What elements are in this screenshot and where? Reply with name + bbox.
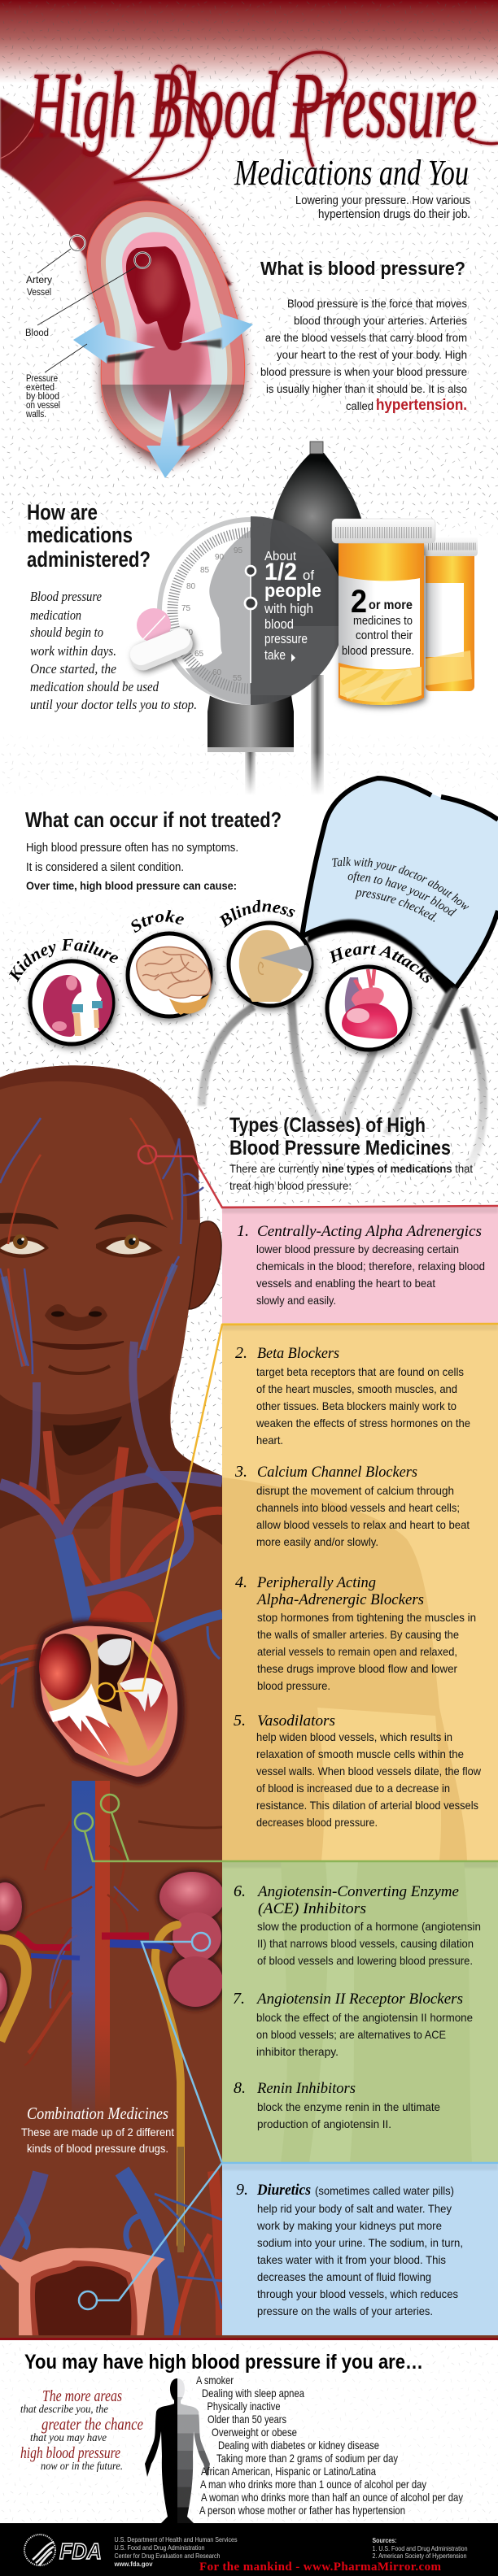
heart valves [98,1638,131,1665]
medicine 5: vessel walls. When blood vessels dilate, the flow [256,1764,482,1778]
medicine 2: of the heart muscles, smooth muscles, and [256,1382,457,1395]
text: blood pressure definition [260,297,467,414]
needle [250,571,251,683]
medicine 8: 8. [234,2079,246,2097]
artery labels: Vessel [27,288,51,298]
medicine 3: channels into blood vessels and heart cells; [256,1501,460,1514]
medicine 1 description: slowly and easily. [256,1294,336,1307]
divider band [0,2335,498,2340]
text: handwriting note on medication: medication should be used [30,679,159,694]
text: blood pressure definition: called [346,399,374,412]
medicine 6: II) that narrows blood vessels, causing dilation [257,1937,474,1950]
medicine 5: of blood is increased due to a decrease in [256,1782,450,1795]
medicine 4: the walls of smaller arteries. By causing the [257,1628,459,1641]
medicine 2 [235,1344,470,1447]
tagline [295,194,470,221]
medicine 9: decreases the amount of fluid flowing [257,2270,431,2283]
white pill [127,625,196,674]
connector: yellow [97,1324,498,1701]
gauge numbers: 75 [181,604,191,613]
gauge base [208,695,294,752]
list: risk factors: Dealing with diabetes or kidney disease [218,2439,379,2452]
stat: half of people take: take [264,647,286,663]
gauge right face [251,516,345,705]
medicine 7 [233,1990,473,2058]
callout connectors [75,1146,498,2309]
text: silent condition [26,842,238,892]
gauge numbers: 65 [194,650,204,659]
stethoscope note: often to have your blood [348,872,457,916]
medicine 8: block the enzyme renin in the ultimate [257,2100,440,2113]
text: handwriting note on medication: work within days. [30,643,116,659]
nose [45,1304,107,1331]
heading: how are medications administered: medications [27,523,133,547]
arrow left [73,321,155,363]
list: risk factors: Taking more than 2 grams of sodium per day [216,2452,398,2465]
medicine 4: these drugs improve blood flow and lower [257,1662,457,1675]
medicine 6 [234,1882,481,1967]
medicine 9: 9. [236,2181,248,2199]
agency lines: www.fda.gov [114,2560,153,2568]
text: blood pressure definition: hypertension. [376,397,467,414]
stat: 2 or more medicines: control their [356,629,413,642]
agency lines [114,2535,238,2568]
medicine 9: (sometimes called water pills) [315,2184,454,2197]
bladder [0,2248,165,2339]
side branches [0,1805,222,2065]
text: handwriting note on medication [30,589,197,712]
text: nine types intro: treat high blood pressure: [229,1179,352,1192]
medicine 4: aterial vessels to remain open and relaxed, [257,1645,457,1658]
stat: 2 or more medicines [342,584,414,658]
text: the more areas script note: that describe you, the [20,2404,108,2416]
medicine 8 [234,2079,440,2130]
stat: half of people take: 1/2 [264,559,297,585]
medicine 5: 5. [234,1712,246,1730]
aorta and vena cava [72,1781,95,2122]
heart [33,1620,185,1785]
callout: combination medicines [21,2104,174,2155]
list: risk factors: Overweight or obese [212,2426,297,2439]
stat: half of people take: of [303,568,314,583]
panel: 6 to 8 green [222,1860,498,2163]
medicine 6: 6. [234,1882,246,1900]
number and heading: 1. [237,1222,249,1240]
illustration: human anatomy [0,1065,227,2339]
text: handwriting note on medication: should begin to [30,624,103,640]
medicine 6: of blood vessels and lowering blood pressure. [257,1954,473,1967]
callout: combination medicines: kinds of blood pressure drugs. [27,2142,168,2155]
artery shadow [87,201,245,466]
artery labels: exerted [26,383,55,393]
medicine 9: help rid your body of salt and water. They [257,2202,452,2215]
medicine 2: 2. [235,1344,247,1362]
icon: heart attacks [322,945,432,1059]
icon: blindness: Blindness [220,899,295,928]
title [0,52,498,183]
medicine 4: Peripherally Acting [256,1574,376,1591]
panel: 9 blue [222,2163,498,2339]
arrow down [146,389,190,478]
medicine 4: Alpha-Adrenergic Blockers [256,1591,424,1608]
stat: half of people take [264,550,321,663]
medicine 2: target beta receptors that are found on cells [256,1365,464,1378]
heading: types of medicines: Types (Classes) of High [229,1114,426,1137]
agency lines: U.S. Food and Drug Administration [114,2543,205,2552]
text: silent condition: High blood pressure often has no symptoms. [26,842,238,855]
artery labels: Pressure [26,374,58,384]
medicine 6: Angiotensin-Converting Enzyme [256,1883,459,1900]
artery labels: on vessel [26,401,60,411]
medicine 7: block the effect of the angiotensin II hormone [256,2011,473,2024]
medicine 9 [236,2181,463,2317]
medicine 1 description [256,1242,485,1307]
medicine 4: 4. [235,1573,247,1591]
medicine 9: Diuretics [256,2182,311,2199]
artery wall [87,201,245,458]
text: silent condition: Over time, high blood pressure can cause: [26,879,237,892]
heading: types of medicines [229,1114,451,1160]
text: silent condition: It is considered a silent condition. [26,861,184,874]
stat: 2 or more medicines: or more [369,598,413,612]
agency lines: U.S. Department of Health and Human Services [114,2535,238,2543]
neck [0,1374,222,1545]
medicine 8: Renin Inhibitors [256,2080,356,2097]
medicine 1 description: chemicals in the blood; therefore, relaxing blood [256,1260,485,1273]
gauge numbers: 70 [184,629,194,637]
eye sockets [0,1236,163,1258]
text: the more areas script note: greater the chance [42,2414,143,2434]
kidneys [0,1869,227,2015]
icon: human silhouette [145,2378,210,2523]
callout: combination medicines: Combination Medicines [27,2104,168,2123]
text: the more areas script note [20,2387,143,2473]
medicine 1 description: lower blood pressure by decreasing certain [256,1242,459,1255]
text: blood pressure definition: blood through your arteries. Arteries [294,314,467,327]
watermark: For the mankind - www.PharmaMirror.com [199,2561,441,2574]
artery labels [25,276,60,420]
gauge numbers: 80 [186,582,196,591]
stat: 2 or more medicines: 2 [351,584,367,620]
list: risk factors: A smoker [196,2374,234,2387]
connector: green [75,1795,498,1861]
heading: what can occur: What can occur if not treated? [25,807,282,832]
medicine 2: heart. [256,1434,283,1447]
pelvic vessels [0,2171,222,2339]
text: the more areas script note: The more areas [42,2387,122,2405]
tagline: Lowering your pressure. How various [295,194,470,207]
medicine 6: (ACE) Inhibitors [258,1900,366,1917]
text: handwriting note on medication: Blood pressure [30,589,102,604]
illustration: blood pressure monitor [127,442,478,795]
medicine 2: weaken the effects of stress hormones on the [256,1416,470,1429]
back bottle [426,549,474,691]
eyes [0,1239,151,1254]
medicine 5: Vasodilators [257,1712,335,1730]
list: risk factors: A man who drinks more than 1 ounce of alcohol per day [200,2478,426,2491]
gauge numbers: 95 [234,546,243,555]
medicine 1 title: Centrally-Acting Alpha Adrenergics [257,1223,482,1240]
ear [189,1221,221,1309]
medicine 5: help widen blood vessels, which results in [256,1730,452,1743]
list: risk factors: African American, Hispanic or Latino/Latina [201,2465,376,2478]
text: blood pressure definition: your heart to the rest of your body. High [277,348,467,361]
gauge numbers: 55 [233,674,242,683]
text: handwriting note on medication: Once started, the [30,661,116,677]
head edge shading [0,1065,199,1220]
medicine 7: on blood vessels; are alternatives to ACE [256,2028,446,2041]
icon: stroke: Stroke [131,910,184,933]
medicine 3: disrupt the movement of calcium through [256,1484,454,1497]
heading: types of medicines: Blood Pressure Medicines [229,1137,451,1160]
gauge numbers: 60 [212,668,222,677]
medicine 2: other tissues. Beta blockers mainly work to [256,1399,456,1412]
heading: what is blood pressure: What is blood pressure? [260,258,465,279]
list: risk factors: A person whose mother or father has hypertension [199,2504,405,2517]
artery labels: Artery [26,276,52,285]
medicine 5: decreases blood pressure. [256,1816,378,1829]
illustration: artery cross-section [0,98,253,478]
body silhouette [0,1065,222,2339]
stat: half of people take: blood [264,616,294,632]
medicine 5 [234,1712,482,1829]
stat: half of people take: About [264,550,297,564]
text: nine types intro [229,1162,473,1192]
medicine 3: 3. [234,1463,247,1481]
list: risk factors [196,2374,463,2517]
tagline: hypertension drugs do their job. [318,207,470,221]
medicine 4: stop hormones from tightening the muscles in [257,1611,476,1624]
medicine 9: takes water with it from your blood. This [257,2253,446,2266]
medicine 4: blood pressure. [257,1679,330,1692]
heading: you may have high blood pressure: You may have high blood pressure if you are… [24,2351,423,2374]
neck vessels [0,1342,222,1708]
sources [373,2536,468,2560]
heading: how are medications administered [27,500,151,572]
callout: combination medicines: These are made up of 2 different [21,2126,174,2139]
gauge left face [210,517,251,705]
leader lines [37,249,138,372]
renal vessels and ureters [0,1925,181,2252]
panel: 2 to 5 yellow [222,1323,498,1860]
medicine 3: more easily and/or slowly. [256,1535,378,1548]
footer [0,2523,498,2576]
text: the more areas script note: that you may have [30,2432,107,2444]
medicine 8: production of angiotensin II. [257,2117,391,2130]
artery tube [0,98,232,325]
medicine 7: inhibitor therapy. [256,2045,339,2058]
stat: 2 or more medicines: medicines to [353,614,413,628]
medicine 9: through your blood vessels, which reduces [257,2287,458,2300]
lips and chin [33,1342,124,1349]
medicine 6: slow the production of a hormone (angiotensin [257,1920,481,1933]
agency lines: Center for Drug Evaluation and Research [114,2552,221,2560]
stat: half of people take: with high [264,601,313,616]
icon: stroke [123,910,219,1025]
text: handwriting note on medication: medication [30,607,81,623]
stat: half of people take: people [264,580,321,601]
stethoscope note: Talk with your doctor about how [332,857,469,909]
icon: heart attacks: Heart Attacks [329,945,432,983]
gauge numbers [181,546,243,683]
sources: 1. U.S. Food and Drug Administration [373,2544,468,2552]
gauge numbers: 85 [200,566,210,575]
medicine 3 [234,1463,470,1548]
head silhouette [186,530,251,705]
connector: blue [79,1933,498,2309]
arrow right [179,313,253,350]
text: the more areas script note: now or in the future. [41,2461,123,2473]
facial blood vessels [0,1118,203,1374]
artery labels: walls. [25,410,46,420]
artery labels: Blood [25,329,49,338]
stat: half of people take: pressure [264,631,308,646]
medicine 1 description: vessels and enabling the heart to beat [256,1277,435,1290]
heading: how are medications administered: administered? [27,547,151,572]
heart chambers [39,1634,91,1700]
medicine 3: Calcium Channel Blockers [257,1464,417,1481]
stand stems [311,675,324,795]
text: blood pressure definition: are the blood vessels that carry blood from [265,331,467,344]
stethoscope note: pressure checked. [355,890,437,922]
medicine 4 [235,1573,476,1692]
medicine 3: allow blood vessels to relax and heart to beat [256,1518,470,1531]
list: risk factors: Older than 50 years [208,2413,286,2426]
text: blood pressure definition: blood pressure is when your blood pressure [260,365,467,378]
sources: 2. American Society of Hypertension [373,2552,467,2560]
artery lumen [122,232,212,423]
blood [126,246,190,350]
stethoscope tubes [202,988,483,1171]
stat: 2 or more medicines: blood pressure. [342,644,414,658]
icon: kidney failure: Kidney Failure [9,938,118,982]
medicine 9: pressure on the walls of your arteries. [257,2304,433,2317]
medicine 2: Beta Blockers [257,1345,339,1362]
medicine 7: 7. [233,1990,245,2008]
sources: Sources: [373,2536,397,2544]
icon: kidney failure [9,938,121,1053]
eyebrows [0,1213,168,1229]
shaded lower wall [102,385,244,458]
pink pill [137,608,171,642]
medicine 9: work by making your kidneys put more [256,2219,442,2232]
medicine 7: Angiotensin II Receptor Blockers [256,1991,463,2008]
text: handwriting note on medication: until your doctor tells you to stop. [30,697,197,712]
text: blood pressure definition: is usually higher than it should be. It is also [266,382,467,395]
stethoscope head [302,778,498,1049]
gauge numbers: 90 [215,553,225,562]
text: blood pressure definition: Blood pressure is the force that moves [287,297,467,310]
medicine 5: relaxation of smooth muscle cells within the [256,1747,464,1760]
connector: pink [138,1146,498,1208]
icon: blindness [220,899,320,1015]
gauge ticks [168,527,251,694]
panel: 1 pink [222,1206,498,1323]
medicine 9: sodium into your urine. The sodium, in turn, [257,2236,463,2249]
text: the more areas script note: high blood pressure [20,2444,120,2462]
logo: HHS [24,2535,55,2565]
list: risk factors: Physically inactive [207,2400,281,2413]
logo: FDA: FDA [59,2539,102,2564]
medicine 5: resistance. This dilation of arterial blood vessels [256,1799,478,1812]
artery labels: by blood [26,392,59,402]
front bottle [339,542,424,705]
bulb [270,453,365,626]
heading: how are medications administered: How are [27,500,98,524]
text: nine types intro: There are currently nine types of medications that [229,1162,473,1175]
list: risk factors: Dealing with sleep apnea [202,2387,304,2400]
